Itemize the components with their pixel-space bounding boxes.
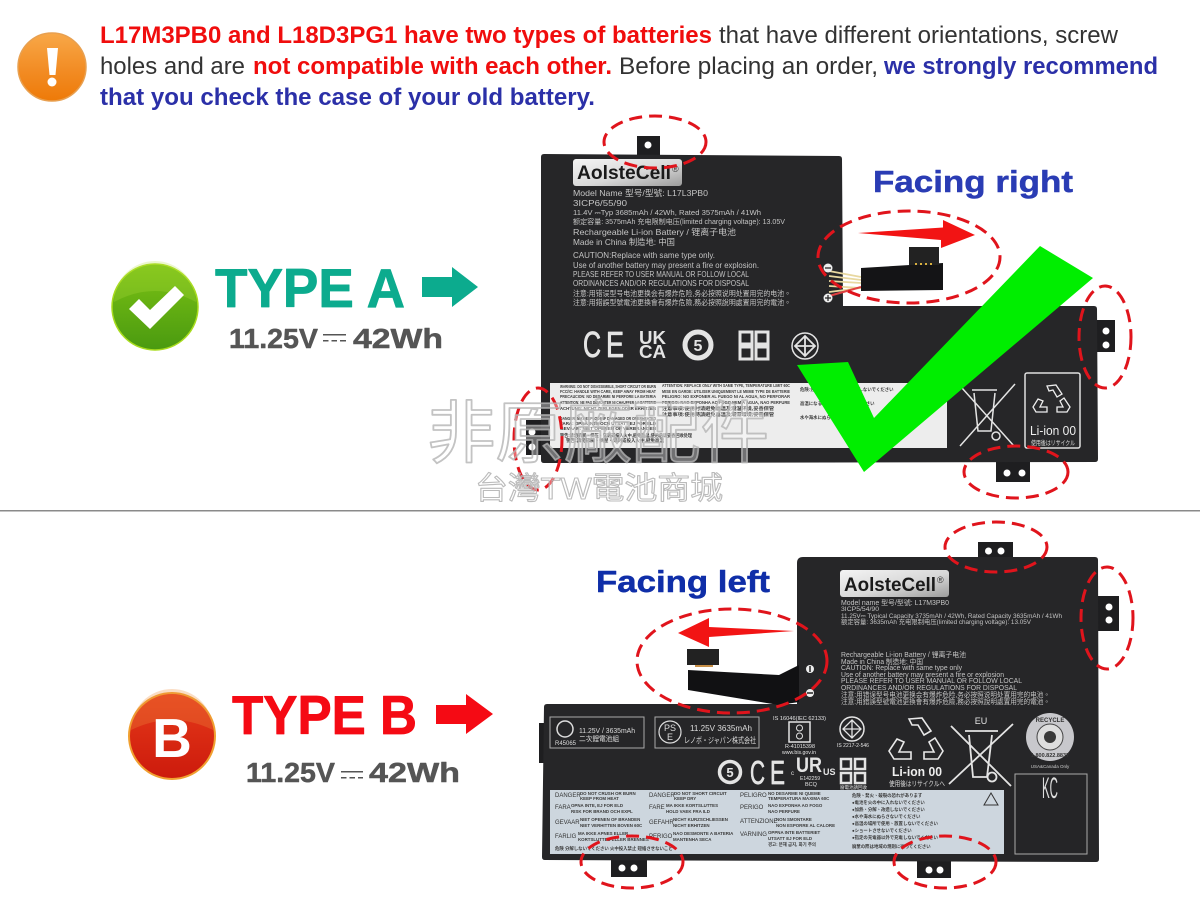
battery B warning strip xyxy=(550,790,1004,854)
facing left label: Facing left xyxy=(596,564,770,599)
type A title: TYPE A xyxy=(215,257,405,319)
battery A label text xyxy=(573,188,791,307)
type B badge: B xyxy=(152,707,192,769)
battery B certification marks: E142259 xyxy=(800,776,820,782)
battery B rating boxes: 11.25V / 3635mAh xyxy=(579,726,635,735)
battery B warning strip: 危険、発火、破裂の恐れがあります xyxy=(852,792,923,799)
battery B warning strip: NIET VERHITTEN BOVEN 60C xyxy=(580,823,643,828)
battery B certification marks: www.bis.gov.in xyxy=(781,750,816,756)
type B title: TYPE B xyxy=(232,684,417,746)
battery B warning strip: ●水や海水にぬらさないでください xyxy=(852,813,921,820)
type B arrow xyxy=(436,694,493,734)
battery B warning strip: PELIGRO xyxy=(740,793,767,799)
battery A label text: PLEASE REFER TO USER MANUAL OR FOLLOW LOCAL xyxy=(573,269,749,279)
battery A warning strip: ATTENTION: REPLACE ONLY WITH SAME TYPE, TEMPERATURE LIMIT 60C xyxy=(662,383,791,388)
battery A warning strip: ATTENTION: NE PAS DEMONTER NI CHAUFFER LA BATTERIE xyxy=(560,400,656,405)
battery B warning strip: NAO DESMONTE A BATERIA xyxy=(673,831,734,836)
heading notice: that you check the case of your old battery. xyxy=(100,84,595,111)
battery B warning strip: ●加熱、分解、改造しないでください xyxy=(852,806,925,813)
battery A warning strip xyxy=(550,383,947,448)
battery A warning strip: 水や海水にぬらさないでください xyxy=(800,414,866,421)
battery A label text: ORDINANCES AND/OR REGULATIONS FOR DISPOSAL xyxy=(573,278,749,288)
type A spec: 42Wh xyxy=(353,323,443,354)
battery B label text xyxy=(841,598,1062,706)
battery B warning strip: RISK FOR BRAND OCH EXPL xyxy=(571,809,633,814)
battery A warning strip: PERIGO: NAO EXPONHA AO FOGO NEM A AGUA, NAO PERFURE xyxy=(662,400,790,405)
type A badge: green check xyxy=(112,261,198,350)
battery B warning strip: DANGER xyxy=(555,793,581,799)
battery B warning strip: KEEP FROM HEAT xyxy=(580,796,619,801)
battery A certification marks: UK xyxy=(639,328,666,348)
battery A warning strip: 注意事項:使用時請避免高溫及潮濕環境,妥善保管 xyxy=(662,411,775,418)
battery A crossed bin xyxy=(960,384,1015,446)
screw hole dashed circles B xyxy=(581,522,1133,888)
battery B warning strip: OPNA INTE, EJ FOR ELD xyxy=(571,803,623,808)
battery B label text: 额定容量: 3635mAh 充电限制电压(limited charging voltage): 13.05V xyxy=(841,617,1032,626)
battery A certification marks: E xyxy=(606,324,624,365)
battery B certification marks xyxy=(720,716,869,791)
battery B warning strip: 廃棄の際は地域の規則に従ってください xyxy=(852,843,931,850)
battery A warning strip: ACHTUNG: NICHT ZERLEGEN ODER ERHITZEN xyxy=(560,406,656,411)
battery B certification marks: c xyxy=(791,771,794,777)
battery B warning strip: MANTENHA SECA xyxy=(673,837,712,842)
battery B recycling mark: 使用後はリサイクルへ xyxy=(889,779,945,788)
battery B warning strip: NON SMONTARE xyxy=(776,817,812,822)
battery B warning strip: ●高温の場所で使用、放置しないでください xyxy=(852,820,939,827)
battery A warning strip: リサイクル xyxy=(880,427,902,434)
battery B recycle seal xyxy=(1026,713,1074,769)
battery A warning strip: DANGER: MAY EXPLODE IF DAMAGED OR OVERHEATED xyxy=(560,416,656,421)
heading notice: not compatible with each other. xyxy=(253,53,612,80)
battery A body xyxy=(526,136,1115,482)
battery B warning strip: NICHT KURZSCHLIESSEN xyxy=(673,817,728,822)
battery A label text: Made in China 制造地: 中国 xyxy=(573,237,675,247)
battery B logo: ® xyxy=(937,575,944,585)
battery B certification marks: E xyxy=(770,754,785,791)
battery B recycle seal: 1.800.822.8837 xyxy=(1031,753,1069,759)
facing right label: Facing right xyxy=(873,164,1073,199)
battery A warning strip: GEVAAR: NIET OPENEN OF VERBRANDEN xyxy=(560,426,656,431)
battery A label text: 3ICP6/55/90 xyxy=(573,198,627,208)
heading notice xyxy=(100,22,1158,111)
battery B rating boxes xyxy=(550,717,759,748)
battery B label text: 注意:用错误型号电池更换会有爆炸危险,务必按照说明处置用完的电池。 xyxy=(841,690,1050,699)
heading notice: holes and are xyxy=(100,53,245,80)
watermark: 台灣TW電池商城 xyxy=(475,471,723,506)
battery A certification marks xyxy=(583,324,818,365)
battery A label text: 注意:用错误型号电池更换会有爆炸危险,务必按照说明处置用完的电池。 xyxy=(573,288,791,298)
type B battery xyxy=(539,522,1133,888)
battery B warning strip: FARE xyxy=(649,805,665,811)
battery B recycle seal: USA&Canada Only xyxy=(1031,764,1070,769)
heading notice: Before placing an order, xyxy=(619,53,878,80)
battery B label text: 注意:用錯誤型號電池更換會有爆炸危險,務必按照說明處置用完的電池。 xyxy=(841,697,1050,706)
battery A label text: 11.4V ⎓Typ 3685mAh / 42Wh, Rated 3575mAh / 41Wh xyxy=(573,208,761,217)
battery B recycle seal: RECYCLE xyxy=(1036,718,1064,724)
battery A logo: ® xyxy=(672,164,679,174)
battery B logo: AolsteCell xyxy=(844,575,936,596)
battery B label text: Model name 型号/型號: L17M3PB0 xyxy=(841,598,949,607)
battery B warning strip: TEMPERATURA MAXIMA 60C xyxy=(768,796,830,801)
battery B certification marks: C xyxy=(750,754,765,791)
type A arrow xyxy=(422,267,478,307)
battery B label text: 3ICP5/54/90 xyxy=(841,606,879,613)
battery B certification marks: 5 xyxy=(726,765,734,780)
battery B certification marks: 廢電池請回收 xyxy=(840,784,867,791)
battery B warning strip: MA IKKE KORTSLUTTES xyxy=(666,803,718,808)
battery A warning strip: 注意事项:使用时请避免高温及潮湿环境,妥善保管 xyxy=(662,405,775,412)
battery B cable xyxy=(687,649,814,705)
battery B rating boxes: R45065 xyxy=(555,741,577,747)
divider xyxy=(0,510,1200,512)
battery B recycling mark xyxy=(889,718,945,788)
battery B warning strip: ATTENZIONE xyxy=(740,819,778,825)
battery A label text: Use of another battery may present a fire or explosion. xyxy=(573,260,759,270)
battery B KC box: KC xyxy=(1042,772,1058,805)
battery B label text: Made in China 制造地: 中国 xyxy=(841,657,923,666)
screw hole dashed circles xyxy=(514,116,1131,498)
battery B warning strip: NAO PERFURE xyxy=(768,809,800,814)
facing right arrow xyxy=(858,220,975,248)
battery B body xyxy=(539,542,1119,878)
battery B rating boxes: PS xyxy=(664,723,676,733)
battery B rating boxes: レノボ・ジャパン株式会社 xyxy=(684,735,756,745)
battery B warning strip: UTSATT EJ FOR ELD xyxy=(768,836,812,841)
battery A warning strip: PELIGRO: NO EXPONER AL FUEGO NI AL AGUA, NO PERFORAR xyxy=(662,394,791,399)
battery B warning strip: GEFAHR xyxy=(649,820,674,826)
battery B warning strip: ●指定の充電器以外で充電しないでください xyxy=(852,834,939,841)
battery A recycling box xyxy=(1025,373,1080,448)
battery B warning strip: 경고: 분해 금지, 화기 주의 xyxy=(768,841,816,848)
warning icon xyxy=(18,33,86,101)
battery A certification marks: 5 xyxy=(694,338,703,355)
battery A warning strip: 危険:分解・加熱・火中投入をしないでください xyxy=(800,386,894,393)
battery B certification marks: IS 2217-2-546 xyxy=(837,743,869,749)
battery B warning strip: NON ESPORRE AL CALORE xyxy=(776,823,835,828)
battery B warning strip: DO NOT CRUSH OR BURN xyxy=(580,791,636,796)
battery B warning strip: OPPNA INTE BATTERIET xyxy=(768,830,821,835)
type A spec xyxy=(229,323,443,354)
battery B warning strip: NIET OPENEN OF BRANDEN xyxy=(580,817,640,822)
heading notice: we strongly recommend xyxy=(883,53,1158,80)
battery B rating boxes: 11.25V 3635mAh xyxy=(690,724,752,733)
facing left arrow xyxy=(678,618,794,647)
battery B warning strip: GEVAAR xyxy=(555,820,580,826)
battery A certification marks: C xyxy=(583,324,601,365)
battery B certification marks: IS 16046(IEC 62133) xyxy=(773,716,826,722)
battery B certification marks: R-41015398 xyxy=(785,744,815,750)
green check mark xyxy=(797,246,1093,472)
battery B EU crossed bin: EU xyxy=(975,716,987,726)
battery B warning strip: FARLIG xyxy=(555,834,577,840)
battery A certification marks: CA xyxy=(639,342,666,362)
battery B KC box xyxy=(1015,772,1087,854)
battery B warning strip: PERIGO xyxy=(740,805,764,811)
battery A warning strip: MISE EN GARDE: UTILISER UNIQUEMENT LE MEME TYPE DE BATTERIE xyxy=(662,389,790,394)
battery B warning strip: KEEP DRY xyxy=(674,796,696,801)
battery B warning strip: MA IKKE APNES ELLER xyxy=(578,831,629,836)
battery A warning strip: 警告:請勿拆解、擠壓、穿刺或投入火中,避免高溫 xyxy=(566,437,665,444)
battery B warning strip: 危険 分解しないでください 火中投入禁止 短絡させないこと xyxy=(555,845,673,852)
battery B recycling mark: Li-ion 00 xyxy=(892,764,942,779)
battery B warning strip: NAO EXPONHA AO FOGO xyxy=(768,803,823,808)
battery A recycling box: Li-ion 00 xyxy=(1030,424,1076,438)
battery A warning strip: PRECAUCION: NO DESARME NI PERFORE LA BATERIA xyxy=(560,394,657,399)
battery B warning strip: HOLD VAEK FRA ILD xyxy=(666,809,710,814)
battery B warning strip: NICHT ERHITZEN xyxy=(673,823,710,828)
type B spec: 42Wh xyxy=(369,757,460,788)
battery B label text: PLEASE REFER TO USER MANUAL OR FOLLOW LOCAL xyxy=(841,678,1022,685)
watermark xyxy=(427,396,769,506)
battery A label text: 注意:用錯誤型號電池更換會有爆炸危險,務必按照說明處置用完的電池。 xyxy=(573,297,791,307)
battery B rating boxes: 二次鋰電池組 xyxy=(579,734,619,743)
battery B rating boxes: E xyxy=(667,732,673,742)
battery A warning strip: FCC/IC: HANDLE WITH CARE, KEEP AWAY FROM HEAT xyxy=(560,389,656,394)
battery A warning strip: 高温になる場所に置かないでください xyxy=(800,400,875,407)
battery A logo xyxy=(573,159,682,186)
battery A warning strip: 警告:请勿拆解、挤压、穿刺或投入火中,避免高温,使用后请妥善回收处理 xyxy=(560,432,693,439)
battery A logo: AolsteCell xyxy=(577,163,671,184)
battery B warning strip: PERIGO xyxy=(649,834,673,840)
battery B warning strip: NO DESARME NI QUEME xyxy=(768,791,821,796)
battery B label text: CAUTION: Replace with same type only xyxy=(841,665,962,672)
battery A warning strip: WARNING: DO NOT DISASSEMBLE, SHORT CIRCUIT OR BURN xyxy=(560,384,656,389)
battery B label text: 11.25V⎓ Typical Capacity 3735mAh / 42Wh, Rated Capacity 3635mAh / 41Wh xyxy=(841,613,1062,620)
battery B warning strip: VARNING xyxy=(740,832,767,838)
battery A cable xyxy=(824,247,943,302)
battery B certification marks: BCQ xyxy=(805,782,818,788)
battery A label text: CAUTION:Replace with same type only. xyxy=(573,250,715,260)
battery B label text: Rechargeable Li-ion Battery / 锂离子电池 xyxy=(841,650,966,659)
battery A warning strip: FARA: OPNA INTE OCH UTSATT EJ FOR ELD xyxy=(560,421,656,426)
battery B warning strip: DANGER xyxy=(649,793,675,799)
battery B warning strip: DO NOT SHORT CIRCUIT xyxy=(674,791,727,796)
battery A label text: 额定容量: 3575mAh 充电限制电压(limited charging voltage): 13.05V xyxy=(573,217,785,226)
battery B warning strip: ●ショートさせないでください xyxy=(852,827,912,834)
battery B warning strip: KORTSLUTTES ELLER BRENNES xyxy=(578,837,649,842)
battery B label text: ORDINANCES AND/OR REGULATIONS FOR DISPOSAL xyxy=(841,685,1017,692)
battery B EU crossed bin xyxy=(949,716,1013,786)
battery A recycling box: 使用後はリサイクル xyxy=(1031,438,1075,447)
battery B label text: Use of another battery may present a fire or explosion xyxy=(841,672,1004,679)
battery B certification marks: UR xyxy=(796,754,822,777)
battery A label text: Rechargeable Li-ion Battery / 锂离子电池 xyxy=(573,227,737,237)
type B spec xyxy=(246,757,460,788)
battery B certification marks: US xyxy=(823,767,836,777)
heading notice: L17M3PB0 and L18D3PG1 have two types of batteries xyxy=(100,22,712,49)
type A spec: 11.25V xyxy=(229,323,318,354)
battery B warning strip: FARA xyxy=(555,805,571,811)
type A battery xyxy=(514,116,1131,498)
heading notice: that have different orientations, screw xyxy=(719,22,1119,49)
watermark: 非原廠配件 xyxy=(427,396,769,472)
type B badge xyxy=(129,689,215,779)
battery B logo xyxy=(840,570,949,597)
type B spec: 11.25V xyxy=(246,757,335,788)
battery B warning strip: ●電池を火の中に入れないでください xyxy=(852,799,925,806)
battery A label text: Model Name 型号/型號: L17L3PB0 xyxy=(573,188,708,198)
